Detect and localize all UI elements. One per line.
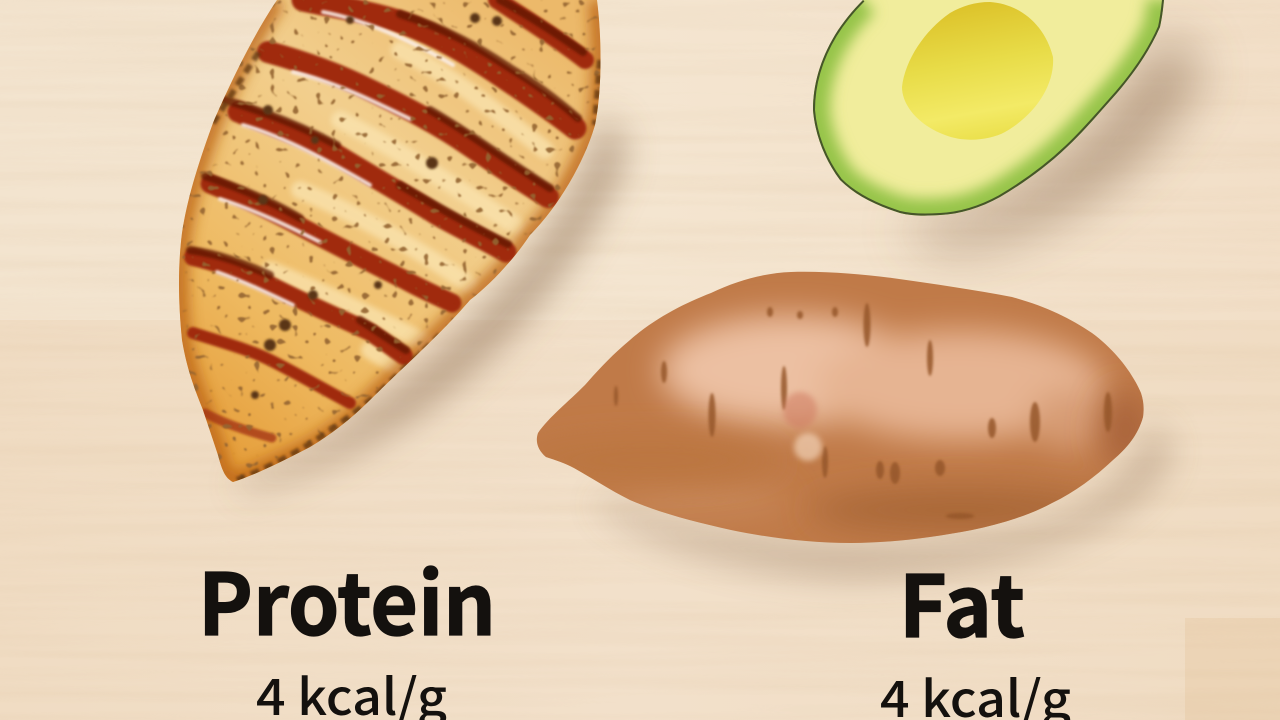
avocado half (813, 0, 1164, 216)
large seasoning specks (251, 13, 502, 399)
avocado pit hollow (902, 2, 1053, 140)
green rim of the flesh (813, 0, 1164, 216)
light areas of skin (610, 315, 1110, 514)
dark shading (520, 390, 1149, 532)
skin blemishes (614, 303, 1112, 519)
heading: Fat: Fat (899, 539, 1025, 662)
pale spot (794, 433, 822, 461)
sweet potato (520, 272, 1149, 543)
dark crust along the lower edge (213, 50, 600, 480)
heading: Protein: Protein (198, 537, 496, 660)
shadows under the foods (240, 30, 1200, 575)
chicken breast with grill marks (175, 0, 605, 485)
grill marks (193, 0, 585, 438)
glaze highlights on grill marks (217, 12, 453, 305)
seasoning specks (175, 0, 605, 485)
pink bruise (783, 392, 817, 428)
pale highlights between the grill marks (270, 50, 545, 365)
browned edge (179, 0, 601, 482)
skin outline (813, 0, 1164, 216)
dark top edge of grill marks (190, 0, 583, 350)
